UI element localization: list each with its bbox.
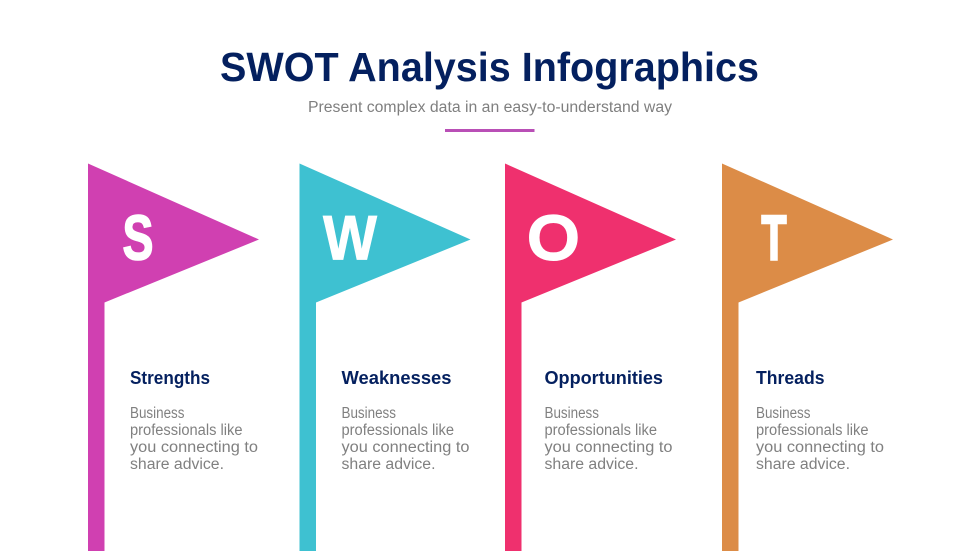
text: threads description: professionals like	[756, 422, 868, 439]
text: strengths description: you connecting to	[130, 439, 258, 456]
text: weaknesses description: Business	[342, 405, 396, 422]
flag: S: S	[122, 204, 154, 274]
flag: W: W	[323, 204, 377, 274]
flag: S	[88, 164, 259, 551]
heading: Opportunities: Opportunities	[544, 367, 663, 388]
flag: O	[505, 164, 676, 551]
text: opportunities description: share advice.	[544, 456, 638, 473]
title underline	[445, 129, 534, 132]
heading: Threads: Threads	[756, 367, 824, 388]
flag: T	[722, 164, 893, 551]
panel: opportunities	[505, 164, 676, 551]
text: weaknesses description: you connecting to	[342, 439, 470, 456]
flag: T: T	[762, 204, 786, 274]
text: strengths description: Business	[130, 405, 185, 422]
panel: threads	[722, 164, 893, 551]
subtitle: Present complex data in an easy-to-understand way	[308, 99, 672, 116]
panel: strengths	[88, 164, 259, 551]
panel: weaknesses	[300, 164, 470, 551]
heading: Weaknesses: Weaknesses	[342, 367, 452, 388]
heading: Strengths: Strengths	[130, 367, 210, 388]
text: weaknesses description	[342, 405, 470, 473]
flag: W	[300, 164, 470, 551]
text: opportunities description: professionals like	[544, 422, 657, 439]
text: strengths description	[130, 405, 258, 473]
text: weaknesses description: share advice.	[342, 456, 436, 473]
text: threads description: Business	[756, 405, 811, 422]
text: opportunities description	[544, 405, 672, 473]
text: opportunities description: Business	[544, 405, 599, 422]
text: weaknesses description: professionals like	[342, 422, 454, 439]
text: threads description	[756, 405, 884, 473]
text: threads description: you connecting to	[756, 439, 884, 456]
text: strengths description: share advice.	[130, 456, 224, 473]
text: opportunities description: you connecting to	[544, 439, 672, 456]
text: strengths description: professionals like	[130, 422, 242, 439]
text: threads description: share advice.	[756, 456, 850, 473]
flag: O: O	[528, 204, 579, 272]
title: SWOT Analysis Infographics	[220, 44, 759, 90]
